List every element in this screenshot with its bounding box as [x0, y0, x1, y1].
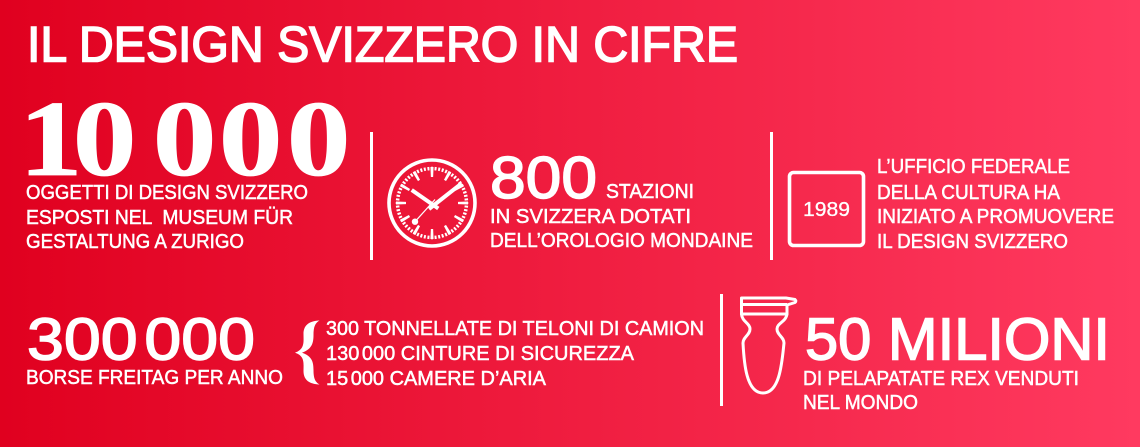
stat: 300 000 Freitag bags: BORSE FREITAG PER ANNO — [26, 367, 283, 389]
stat: 10 000 design objects — [19, 79, 350, 253]
text: federal office of culture: L’UFFICIO FEDERALE — [877, 156, 1070, 178]
stat: 800 stations: 800 — [490, 144, 597, 211]
caption: design objects: OGGETTI DI DESIGN SVIZZERO — [26, 182, 308, 204]
icon: Rex peeler — [742, 298, 796, 393]
stat: 800 stations — [490, 144, 753, 252]
big number 10 000: 10 000 — [19, 79, 350, 199]
text: federal office of culture: INIZIATO A PROMUOVERE — [877, 206, 1114, 228]
caption: design objects: GESTALTUNG A ZURIGO — [26, 231, 244, 253]
stat: 50 million peelers: DI PELAPATATE REX VENDUTI — [803, 368, 1079, 390]
caption: design objects — [26, 182, 308, 253]
icon: 1989 box — [790, 172, 864, 246]
stat: 800 stations: IN SVIZZERA DOTATI — [490, 206, 691, 228]
stat: 300 000 Freitag bags: 300 000 — [27, 306, 255, 372]
list: bag materials — [326, 318, 704, 390]
list: bag materials: 300 TONNELLATE DI TELONI DI CAMION — [326, 318, 704, 340]
stat: 800 stations: STAZIONI — [606, 181, 694, 203]
caption: design objects: ESPOSTI NEL MUSEUM FÜR — [26, 207, 293, 229]
stat: 50 million peelers: NEL MONDO — [803, 392, 918, 414]
icon: 1989 box: 1989 — [803, 199, 850, 221]
text: federal office of culture: DELLA CULTURA HA — [877, 182, 1061, 204]
text: federal office of culture: IL DESIGN SVIZZERO — [877, 231, 1068, 253]
stat: 50 million peelers: 50 MILIONI — [805, 306, 1110, 372]
title: IL DESIGN SVIZZERO IN CIFRE — [27, 16, 738, 72]
stat: 300 000 Freitag bags — [26, 306, 283, 389]
stat: 800 stations: DELL’OROLOGIO MONDAINE — [490, 230, 753, 252]
list: bag materials: 15 000 CAMERE D’ARIA — [326, 368, 547, 390]
stat: 50 million peelers — [803, 306, 1110, 414]
icon: curly brace — [295, 320, 320, 384]
icon: station clock — [389, 160, 475, 246]
list: bag materials: 130 000 CINTURE DI SICUREZZA — [326, 343, 635, 365]
text: federal office of culture — [877, 156, 1114, 253]
